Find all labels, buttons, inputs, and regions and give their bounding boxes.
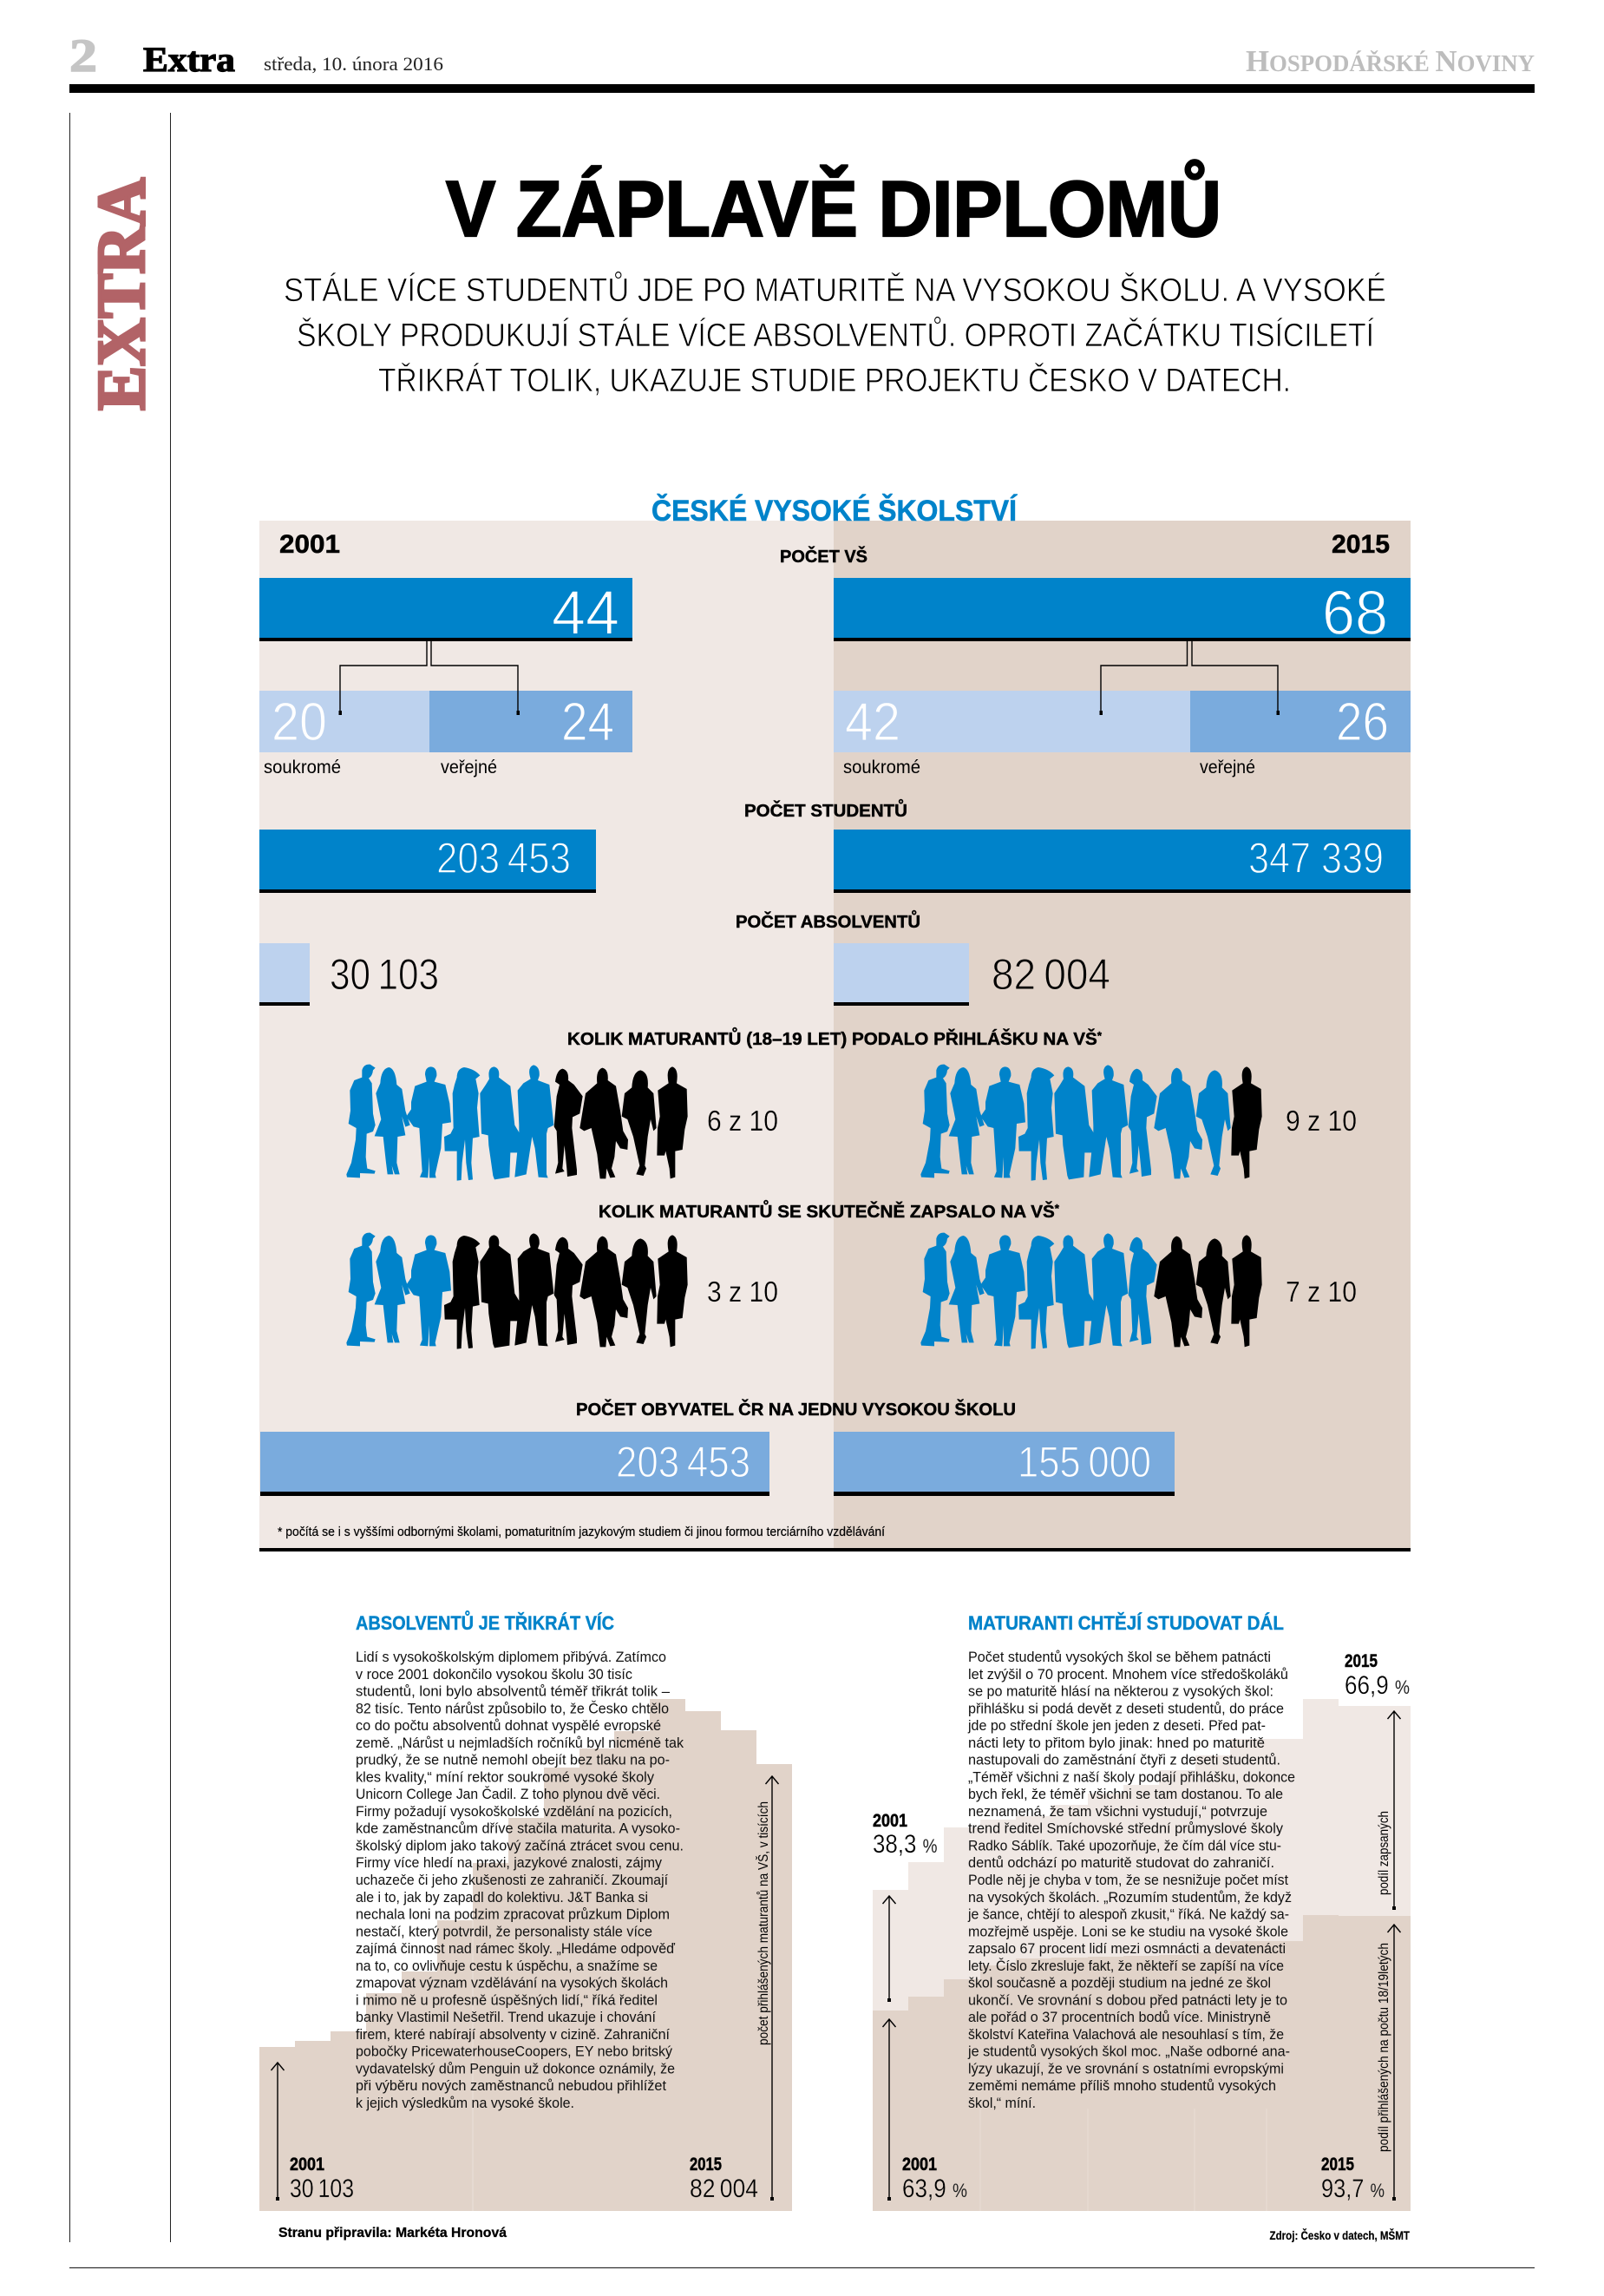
axis label: počet přihlášených maturantů na VŠ, v tisících: [755, 1801, 771, 2045]
chart: applied and enrolled staircase: [873, 1651, 1411, 2211]
panel: České vysoké školství: [259, 494, 1411, 1551]
people icons: 3 of 10: [346, 1233, 688, 1349]
subtitle: [284, 270, 1386, 399]
article body: zajímá činnost nad rámec školy. „Hledáme odpověď: [356, 1940, 676, 1957]
page number: 2: [69, 30, 97, 82]
article body: Počet studentů vysokých škol se během patnácti: [968, 1649, 1271, 1665]
value 2015: [690, 2155, 758, 2203]
section name: Extra: [143, 40, 235, 79]
article body: Podle něj je chyba v tom, že se nesnižuje počet míst: [968, 1872, 1288, 1888]
labels private/public 2015: veřejné: [1200, 758, 1255, 777]
article heading: ABSOLVENTŮ JE TŘIKRÁT VÍC: [356, 1610, 614, 1634]
article body: bych řekl, že téměř všichni se tam dostanou. To ale: [968, 1786, 1283, 1802]
value 2015: 82 004: [690, 2175, 758, 2203]
labels private/public 2001: [264, 758, 497, 777]
article body: ale pořád o 37 procentních bodů více. Ministryně: [968, 2009, 1271, 2025]
bar: graduates 2015: [834, 943, 1110, 1006]
article body: uchazeče či jeho zkušenosti ze zahraničí. Zkoumají: [356, 1872, 668, 1888]
article body: studentů, loni bylo absolventů téměř třikrát tolik –: [356, 1683, 671, 1699]
article body: nechala loni na podzim zpracovat průzkum Diplom: [356, 1906, 670, 1923]
staircase area: [259, 1699, 792, 2211]
date: středa, 10. února 2016: [264, 53, 443, 75]
label: počet VŠ: POČET VŠ: [780, 546, 867, 567]
value: applied 2015: 2015: [1321, 2155, 1354, 2175]
label: počet absolventů: POČET ABSOLVENTŮ: [736, 909, 920, 932]
newspaper header: [69, 30, 1535, 93]
article body: při výběru nových zaměstnanců nebudou přihlížet: [356, 2077, 666, 2094]
article body: dentů odchází po maturitě studovat do zahraničí.: [968, 1854, 1274, 1871]
people icons: 9 of 10: [920, 1065, 1262, 1181]
bar: population 2015: [834, 1432, 1175, 1496]
article body: škol současně a později studium na jedné ze škol: [968, 1975, 1271, 1991]
bar: 44 schools 2001: [259, 578, 632, 648]
value: enrolled 2015: [1345, 1651, 1410, 1700]
value: applied 2001: 63,9 %: [902, 2175, 967, 2203]
bar: 44 schools 2001: 44: [552, 579, 619, 648]
article body: Unicorn College Jan Čadil. Z toho plynou dvě věci.: [356, 1786, 660, 1802]
axis label: enrolled: podíl zapsaných: [1377, 1811, 1391, 1895]
article body: na vysokých školách. „Rozumím studentům, že když: [968, 1889, 1292, 1906]
article body: v roce 2001 dokončilo vysokou školu 30 tisíc: [356, 1666, 632, 1683]
article body: školství Kateřina Valachová ale nesouhlasí s tím, že: [968, 2026, 1284, 2043]
article body: kles kvality,“ míní rektor soukromé vysoké školy: [356, 1768, 654, 1785]
year 2015: 2015: [1332, 530, 1390, 559]
article body: nácti lety to přitom bylo jinak: hned po maturitě: [968, 1735, 1265, 1751]
bar: population 2001: 203 453: [616, 1438, 750, 1486]
article body: přihlášku si podá devět z deseti studentů, do práce: [968, 1700, 1284, 1716]
article body: je studentů vysokých škol moc. „Naše odborné ana-: [967, 2043, 1290, 2060]
arrow: applied 2001: [883, 2019, 895, 2201]
subtitle: ŠKOLY PRODUKUJÍ STÁLE VÍCE ABSOLVENTŮ. OPROTI ZAČÁTKU TISÍCILETÍ: [297, 315, 1374, 354]
article body: trend ředitel Smíchovské střední průmyslové školy: [968, 1820, 1283, 1837]
value: enrolled 2001: 2001: [873, 1811, 907, 1831]
value 2001: 30 103: [290, 2175, 354, 2203]
bar: population 2015: 155 000: [1018, 1438, 1151, 1486]
value: 9 z 10: 9 z 10: [1286, 1105, 1357, 1137]
value 2001: [290, 2155, 354, 2203]
article body: [967, 1649, 1295, 2111]
panel background 2015: [834, 521, 1411, 1548]
article: graduates: [356, 1610, 684, 2111]
axis label: applied: podíl přihlášených na počtu 18/19letých: [1377, 1943, 1391, 2152]
split bar 2001: 24: [561, 692, 614, 752]
article body: nastupovali do zaměstnání čtyři z deseti studentů.: [968, 1752, 1280, 1768]
people icons: 6 of 10: [346, 1065, 688, 1181]
label: enrolled: *: [1055, 1202, 1060, 1215]
article body: Radko Sáblík. Také upozorňuje, že čím dál více stu-: [968, 1838, 1281, 1853]
article body: i mimo ně u profesně úspěšných lidí,“ říká ředitel: [356, 1991, 658, 2008]
bar: 68 schools 2015: [834, 578, 1411, 648]
split bar 2015: 42: [845, 692, 900, 752]
article body: lety. Číslo zkresluje fakt, že někteří se zapíší na více: [968, 1958, 1284, 1974]
article body: ukončí. Ve srovnání s dobou před patnácti lety je to: [968, 1991, 1287, 2008]
article body: Lidí s vysokoškolským diplomem přibývá. Zatímco: [356, 1649, 666, 1665]
split bar 2015: [834, 691, 1411, 752]
arrow 2001: [271, 2063, 285, 2201]
title: V ZÁPLAVĚ DIPLOMŮ: [446, 160, 1221, 253]
arrow: applied 2015: [1388, 1925, 1400, 2201]
labels private/public 2015: [843, 758, 1255, 777]
staircase: enrolled share: [873, 1699, 1411, 2211]
arrow: enrolled 2015: [1388, 1711, 1400, 1910]
label: počet studentů: POČET STUDENTŮ: [744, 798, 907, 821]
bar: students 2015: 347 339: [1248, 834, 1384, 882]
article body: Firmy požadují vysokoškolské vzdělání na pozicích,: [356, 1803, 672, 1820]
chart: graduates staircase: [259, 1699, 792, 2211]
subtitle: STÁLE VÍCE STUDENTŮ JDE PO MATURITĚ NA VYSOKOU ŠKOLU. A VYSOKÉ: [284, 270, 1386, 309]
value: applied 2001: [902, 2155, 967, 2203]
value: enrolled 2001: [873, 1811, 937, 1859]
article body: jde po střední škole jen jeden z deseti. Před pat-: [967, 1717, 1266, 1734]
value 2015: 2015: [690, 2155, 722, 2175]
vertical section label: EXTRA: [83, 178, 159, 410]
label: applications: *: [1097, 1029, 1103, 1042]
value: 3 z 10: 3 z 10: [707, 1276, 778, 1308]
value: applied 2015: [1321, 2155, 1385, 2203]
split bar 2001: [259, 691, 632, 752]
label: population per school: POČET OBYVATEL ČR NA JEDNU VYSOKOU ŠKOLU: [576, 1399, 1016, 1420]
arrow 2015: [765, 1776, 779, 2201]
bar: students 2001: 203 453: [436, 834, 571, 882]
article body: Firmy více hledí na praxi, jazykové znalosti, zájmy: [356, 1854, 662, 1871]
footnote: * počítá se i s vyššími odbornými školami, pomaturitním jazykovým studiem či jinou formou terciárního vzdělávání: [278, 1525, 886, 1539]
article body: zapsalo 67 procent lidí mezi osmnácti a devatenácti: [968, 1940, 1286, 1957]
article body: na to, co ovlivňuje cestu k úspěchu, a snažíme se: [356, 1958, 658, 1974]
label: applications: KOLIK MATURANTŮ (18–19 LET) PODALO PŘIHLÁŠKU NA VŠ: [567, 1030, 1080, 1049]
bar: 68 schools 2015: 68: [1322, 579, 1388, 648]
split bar 2015: 26: [1336, 692, 1389, 752]
value: applied 2001: 2001: [902, 2155, 937, 2175]
value 2001: 2001: [290, 2155, 324, 2175]
panel heading: ČESKÉ VYSOKÉ ŠKOLSTVÍ: [651, 494, 1018, 528]
article body: vydavatelský dům Penguin už dokonce oznámily, že: [356, 2060, 675, 2076]
article body: kde zaměstnancům dříve stačila maturita. A vysoko-: [356, 1820, 680, 1837]
article body: co do počtu absolventů dohnat vyspělé evropské: [356, 1717, 661, 1734]
article body: 82 tisíc. Tento nárůst způsobilo to, že Česko chtělo: [356, 1700, 669, 1716]
article body: zeměmi nemáme příliš mnoho studentů vysokých: [968, 2077, 1276, 2094]
article body: mozřejmě uspěje. Loni se ke studiu na vysoké škole: [968, 1923, 1288, 1939]
article body: prudký, že se nutně nemohl obejít bez tlaku na po-: [356, 1752, 670, 1768]
masthead: HOSPODÁŘSKÉ NOVINY: [1246, 44, 1535, 78]
article body: neznamená, že tam všichni vystudují,“ potvrzuje: [968, 1803, 1267, 1820]
article heading: MATURANTI CHTĚJÍ STUDOVAT DÁL: [968, 1612, 1284, 1634]
article body: školský diplom jako takový začíná ztrácet svou cenu.: [356, 1838, 684, 1853]
arrow: enrolled 2001: [883, 1896, 895, 2002]
article body: se po maturitě hlásí na některou z vysokých škol:: [968, 1683, 1273, 1699]
article body: pobočky PricewaterhouseCoopers, EY nebo britský: [356, 2043, 672, 2060]
connector 2015: [1100, 641, 1280, 715]
value: 7 z 10: 7 z 10: [1286, 1276, 1357, 1308]
header rule: [69, 84, 1535, 93]
bar: graduates 2001: [259, 943, 439, 1006]
staircase: applied share: [873, 1915, 1411, 2211]
value: applied 2015: 93,7 %: [1321, 2175, 1385, 2203]
year 2001: 2001: [279, 530, 340, 559]
bar: graduates 2015: 82 004: [992, 950, 1110, 999]
label: enrolled: KOLIK MATURANTŮ SE SKUTEČNĚ ZAPSALO NA VŠ: [599, 1203, 1040, 1222]
article body: zmapovat význam vzdělávání na vysokých školách: [356, 1975, 668, 1991]
article body: je šance, chtějí to alespoň zkusit,“ říká. Ne každý sa-: [967, 1906, 1289, 1923]
labels private/public 2015: soukromé: [843, 758, 920, 777]
labels private/public 2001: veřejné: [441, 758, 497, 777]
article body: nestačí, který potvrdil, že personalisty stále více: [356, 1923, 652, 1939]
article body: škol,“ míní.: [968, 2095, 1036, 2111]
value: enrolled 2015: 2015: [1345, 1651, 1378, 1671]
panel bottom rule: [259, 1548, 1411, 1551]
article body: let zvýšil o 70 procent. Mnohem více středoškoláků: [968, 1666, 1288, 1683]
bar: students 2001: [259, 830, 596, 893]
article body: firem, které nabírají absolventy v cizině. Zahraniční: [356, 2026, 670, 2043]
article: school leavers: [967, 1612, 1295, 2111]
people icons: 7 of 10: [920, 1233, 1262, 1349]
article body: lýzy ukazují, že ve srovnání s ostatními evropskými: [968, 2060, 1284, 2076]
article body: k jejich výsledkům na vysoké škole.: [356, 2095, 574, 2111]
labels private/public 2001: soukromé: [264, 758, 341, 777]
article body: [356, 1649, 684, 2111]
value: enrolled 2001: 38,3 %: [873, 1830, 937, 1859]
subtitle: TŘIKRÁT TOLIK, UKAZUJE STUDIE PROJEKTU ČESKO V DATECH.: [378, 361, 1291, 399]
source: Zdroj: Česko v datech, MŠMT: [1270, 2227, 1410, 2242]
panel background 2001: [259, 521, 834, 1548]
bar: graduates 2001: 30 103: [330, 950, 439, 999]
value: 6 z 10: 6 z 10: [707, 1105, 778, 1137]
credit: Stranu připravila: Markéta Hronová: [278, 2226, 507, 2240]
article body: banky Vlastimil Nešetřil. Trend ukazuje i chování: [356, 2009, 656, 2025]
bar: population 2001: [260, 1432, 769, 1496]
split bar 2001: 20: [272, 692, 327, 752]
article body: země. „Nárůst u nejmladších ročníků byl nicméně tak: [356, 1735, 684, 1751]
article body: ale i to, jak by zapadl do kolektivu. J&T Banka si: [356, 1889, 648, 1906]
connector 2001: [338, 641, 520, 715]
value: enrolled 2015: 66,9 %: [1345, 1671, 1410, 1700]
article body: „Téměř všichni z naší školy podají přihlášku, dokonce: [968, 1768, 1295, 1785]
bar: students 2015: [834, 830, 1411, 893]
